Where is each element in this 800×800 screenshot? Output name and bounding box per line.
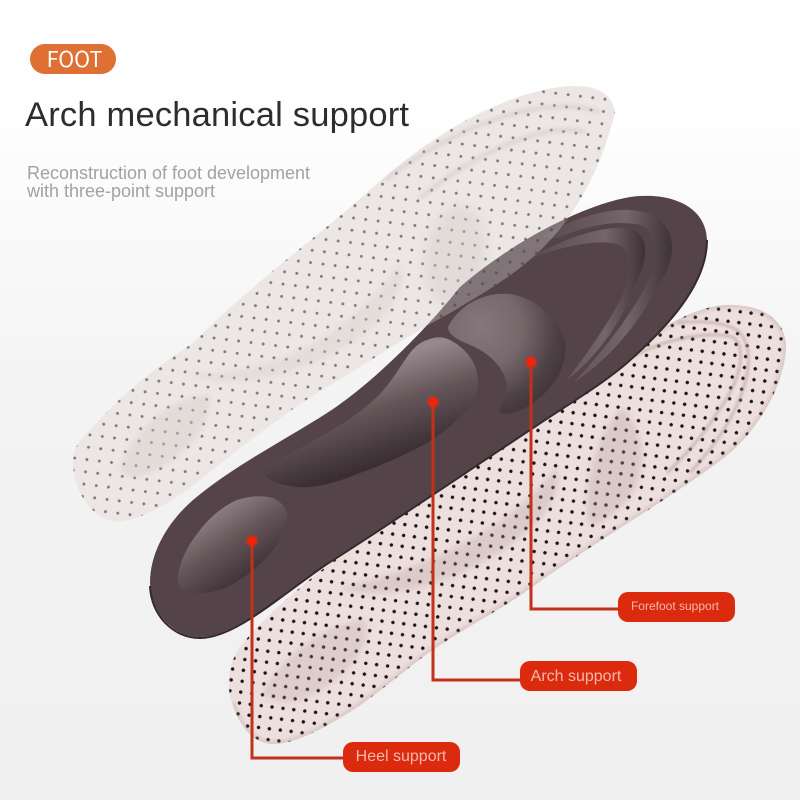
- translucent overlap of top layer on dark foam: [426, 218, 568, 326]
- callout: heel support: [245, 534, 460, 772]
- insole: patterned bottom layer: [229, 305, 786, 744]
- insole: faded top layer: [73, 86, 615, 521]
- title: Arch mechanical support: [25, 96, 409, 134]
- subtitle: with three-point support: [26, 181, 215, 201]
- arch mechanical pad: forefoot: [448, 294, 565, 414]
- subtitle: Reconstruction of foot development: [27, 163, 310, 183]
- tag: FOOT: [30, 43, 116, 74]
- callout: forefoot support: Forefoot support: [631, 599, 720, 613]
- callout: arch support: Arch support: [531, 668, 622, 685]
- tag: FOOT: FOOT: [47, 43, 103, 74]
- callout: forefoot support: [524, 355, 735, 622]
- arch mechanical pad: arch: [263, 337, 478, 487]
- callout: heel support: Heel support: [356, 748, 447, 765]
- callout: arch support: [426, 395, 637, 691]
- forefoot ridges: [530, 210, 672, 383]
- arch mechanical pad: heel: [178, 496, 287, 593]
- insole: dark foam middle layer: [150, 196, 707, 638]
